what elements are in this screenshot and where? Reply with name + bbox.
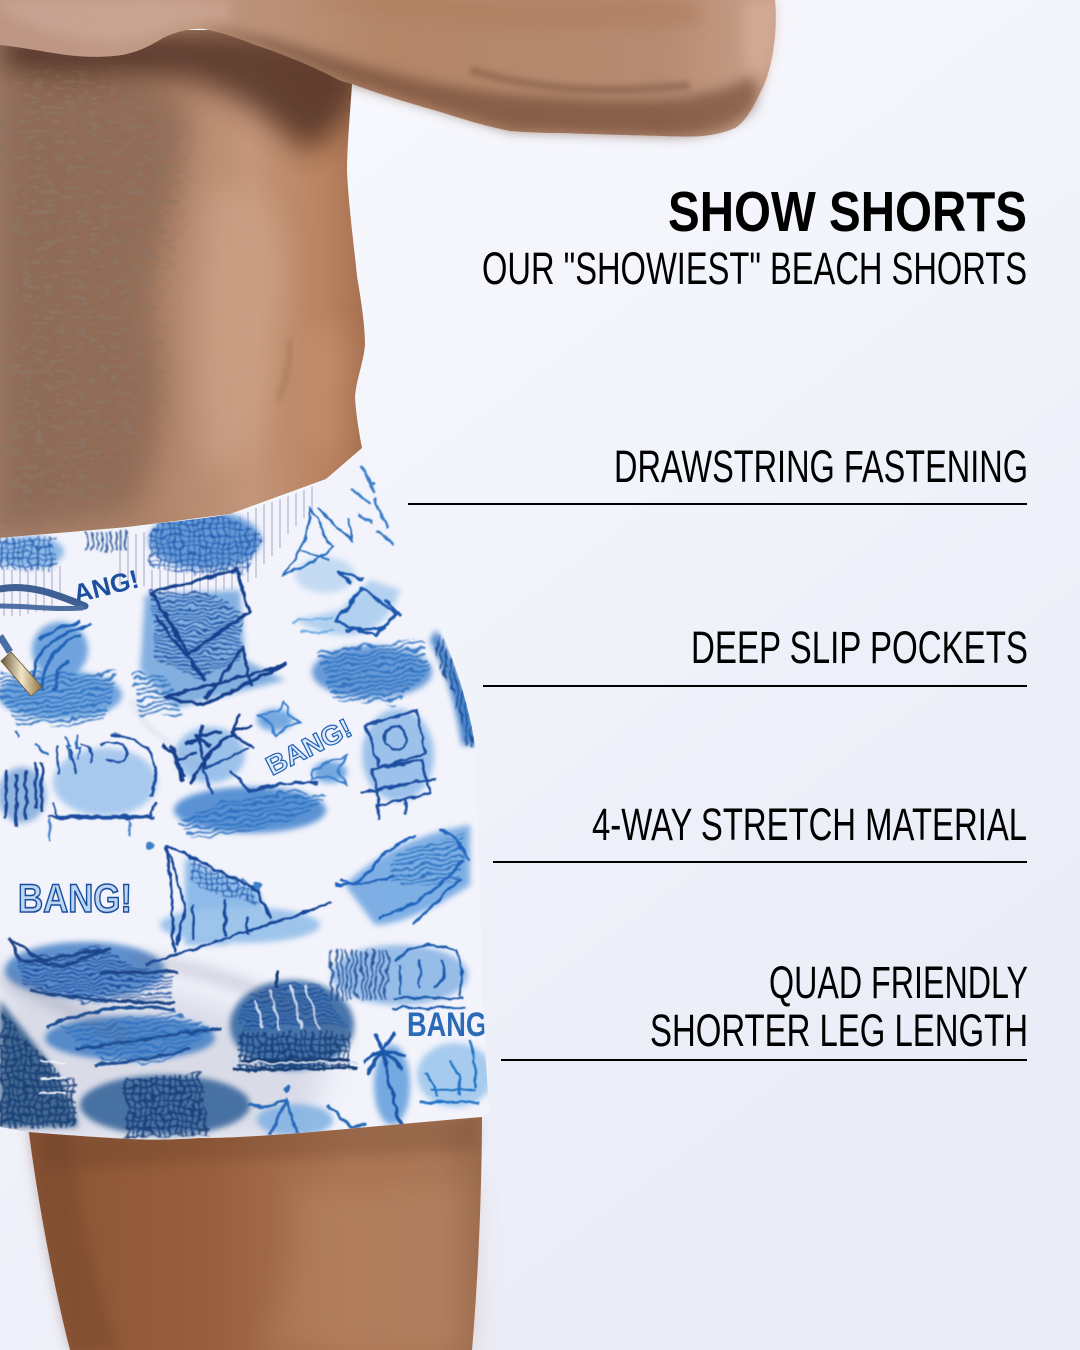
fabric shadow folds bbox=[130, 960, 350, 1040]
cord bbox=[0, 587, 85, 606]
lifeguard tower bbox=[360, 710, 436, 821]
lightning bbox=[14, 730, 80, 759]
fabric lower grey shade bbox=[0, 960, 330, 1140]
dome hatch bbox=[150, 512, 262, 575]
waistband gathering bbox=[4, 484, 312, 616]
wave break bbox=[390, 835, 465, 886]
hotel walls bbox=[238, 1032, 350, 1070]
jet hull bbox=[178, 791, 325, 838]
hotel roof bbox=[240, 982, 348, 1030]
drawstring bbox=[0, 587, 85, 696]
print washes bbox=[0, 511, 493, 1136]
dock bbox=[125, 1072, 210, 1136]
print hatching bbox=[0, 512, 477, 1136]
print word: left: BANG! bbox=[18, 877, 132, 921]
table bbox=[50, 820, 130, 842]
runner bbox=[248, 1086, 366, 1136]
flamingos bbox=[420, 1040, 480, 1102]
hair texture bbox=[0, 76, 179, 508]
boat bbox=[152, 570, 285, 705]
arm muscle crease bbox=[470, 70, 690, 90]
hotel bbox=[228, 976, 358, 1062]
heading bbox=[482, 180, 1027, 294]
buggy bbox=[336, 571, 401, 636]
shorts fabric bbox=[0, 440, 500, 1150]
light flank bbox=[200, 198, 286, 454]
building bbox=[0, 1010, 78, 1127]
waist right print bbox=[352, 465, 394, 544]
shorts bbox=[0, 440, 500, 1150]
party right bbox=[392, 945, 466, 1008]
palms bbox=[162, 713, 254, 785]
pocket bbox=[432, 635, 477, 745]
party bbox=[48, 735, 156, 818]
star bbox=[258, 702, 300, 736]
wave foam bbox=[335, 830, 468, 925]
net post bbox=[145, 845, 330, 965]
wash: top left bbox=[0, 536, 64, 568]
house roof bbox=[10, 937, 178, 1002]
print word: top: ANG! bbox=[70, 564, 142, 609]
elbow highlight bbox=[742, 0, 775, 90]
sea right bbox=[315, 640, 430, 705]
print word: right: BANG bbox=[407, 1006, 487, 1044]
arch wave bbox=[33, 622, 91, 690]
cloud bbox=[292, 616, 334, 632]
feature: quad friendly shorter leg length bbox=[501, 957, 1028, 1061]
underarm shadow bbox=[0, 30, 360, 150]
arm underside shade bbox=[204, 29, 762, 136]
arm top tone bbox=[300, 0, 700, 29]
torso bbox=[0, 30, 370, 540]
hair tone bbox=[0, 76, 190, 530]
print words bbox=[18, 564, 487, 1044]
surfer bbox=[285, 508, 352, 575]
print ink drawings bbox=[6, 465, 480, 1136]
crowd left bbox=[6, 762, 42, 827]
building windows bbox=[40, 1062, 66, 1093]
jet boat bbox=[204, 749, 318, 795]
top-left hatch bbox=[0, 537, 55, 570]
sea mid bbox=[130, 672, 185, 715]
metal tip bbox=[1, 652, 42, 696]
hand fold highlight bbox=[0, 0, 230, 41]
crowd bbox=[330, 950, 390, 1000]
star 2 bbox=[312, 756, 346, 784]
leg bbox=[28, 1110, 482, 1350]
arm bbox=[0, 0, 776, 137]
ball bbox=[146, 842, 154, 850]
house bbox=[18, 945, 175, 1005]
boat block bbox=[150, 590, 245, 680]
muscle crease bbox=[278, 340, 290, 400]
net bbox=[186, 855, 258, 905]
surf foam bbox=[46, 1007, 220, 1065]
sea left bbox=[0, 672, 118, 728]
palm bbox=[363, 1032, 405, 1132]
surf bbox=[60, 1012, 215, 1065]
small block bbox=[84, 532, 130, 550]
print word: tilted: BANG! bbox=[261, 713, 357, 781]
